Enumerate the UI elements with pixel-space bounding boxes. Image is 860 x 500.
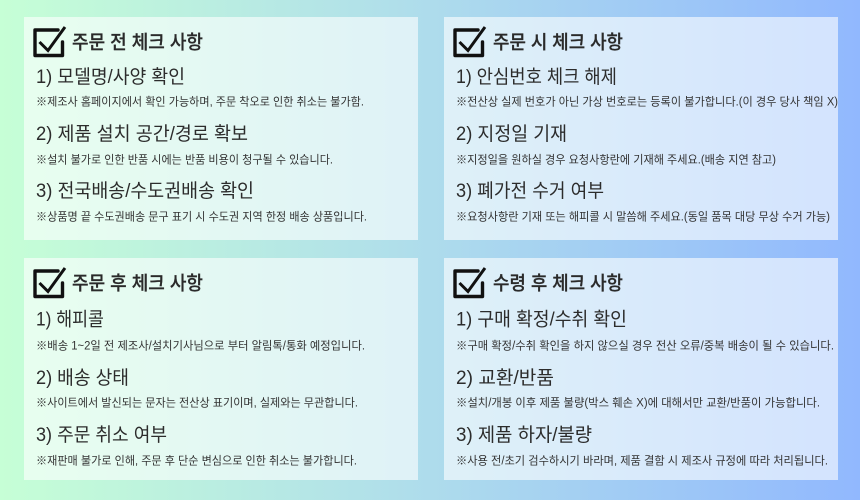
panel: after order xyxy=(24,258,418,480)
icon: checkbox xyxy=(455,27,485,56)
item 1 note: ※구매 확정/수취 확인을 하지 않으실 경우 전산 오류/중복 배송이 될 수 있습니다. xyxy=(456,338,834,352)
icon: checkbox xyxy=(35,268,65,296)
item 1 title: 1) 해피콜 xyxy=(36,308,104,330)
heading: after order: 주문 후 체크 사항 xyxy=(72,272,203,294)
icon: checkbox xyxy=(35,27,65,56)
item 1 title: 1) 모델명/사양 확인 xyxy=(36,66,185,88)
item 3 title: 3) 주문 취소 여부 xyxy=(36,424,167,446)
item 3 note: ※사용 전/초기 검수하시기 바라며, 제품 결함 시 제조사 규정에 따라 처리됩니다. xyxy=(456,454,828,468)
panel: after delivery xyxy=(444,258,838,480)
item 3 title: 3) 폐가전 수거 여부 xyxy=(456,180,604,202)
item 2 title: 2) 지정일 기재 xyxy=(456,123,567,145)
item 2 title: 2) 교환/반품 xyxy=(456,367,554,389)
item 3 note: ※상품명 끝 수도권배송 문구 표기 시 수도권 지역 한정 배송 상품입니다. xyxy=(36,210,367,224)
item 2 note: ※설치 불가로 인한 반품 시에는 반품 비용이 청구될 수 있습니다. xyxy=(36,152,333,166)
item 3 title: 3) 제품 하자/불량 xyxy=(456,424,592,446)
panel: before order xyxy=(24,17,418,240)
item 2 note: ※지정일을 원하실 경우 요청사항란에 기재해 주세요.(배송 지연 참고) xyxy=(456,152,776,166)
item 2 title: 2) 배송 상태 xyxy=(36,367,129,389)
panel: when ordering xyxy=(444,17,838,240)
item 2 title: 2) 제품 설치 공간/경로 확보 xyxy=(36,123,248,145)
heading: after delivery: 수령 후 체크 사항 xyxy=(493,272,623,294)
heading: before order: 주문 전 체크 사항 xyxy=(72,32,203,54)
icon: checkbox xyxy=(455,268,485,296)
item 1 title: 1) 구매 확정/수취 확인 xyxy=(456,308,627,330)
item 1 note: ※제조사 홈페이지에서 확인 가능하며, 주문 착오로 인한 취소는 불가함. xyxy=(36,94,364,108)
item 1 title: 1) 안심번호 체크 해제 xyxy=(456,66,617,88)
item 1 note: ※전산상 실제 번호가 아닌 가상 번호로는 등록이 불가합니다.(이 경우 당사 책임 X) xyxy=(456,94,838,108)
item 1 note: ※배송 1~2일 전 제조사/설치기사님으로 부터 알림톡/통화 예정입니다. xyxy=(36,338,365,352)
heading: when ordering: 주문 시 체크 사항 xyxy=(493,32,623,54)
item 3 note: ※재판매 불가로 인해, 주문 후 단순 변심으로 인한 취소는 불가합니다. xyxy=(36,454,357,468)
item 3 title: 3) 전국배송/수도권배송 확인 xyxy=(36,180,254,202)
item 2 note: ※설치/개봉 이후 제품 불량(박스 훼손 X)에 대해서만 교환/반품이 가능합니다. xyxy=(456,396,820,410)
item 2 note: ※사이트에서 발신되는 문자는 전산상 표기이며, 실제와는 무관합니다. xyxy=(36,396,358,410)
item 3 note: ※요청사항란 기재 또는 해피콜 시 말씀해 주세요.(동일 품목 대당 무상 수거 가능) xyxy=(456,210,830,224)
